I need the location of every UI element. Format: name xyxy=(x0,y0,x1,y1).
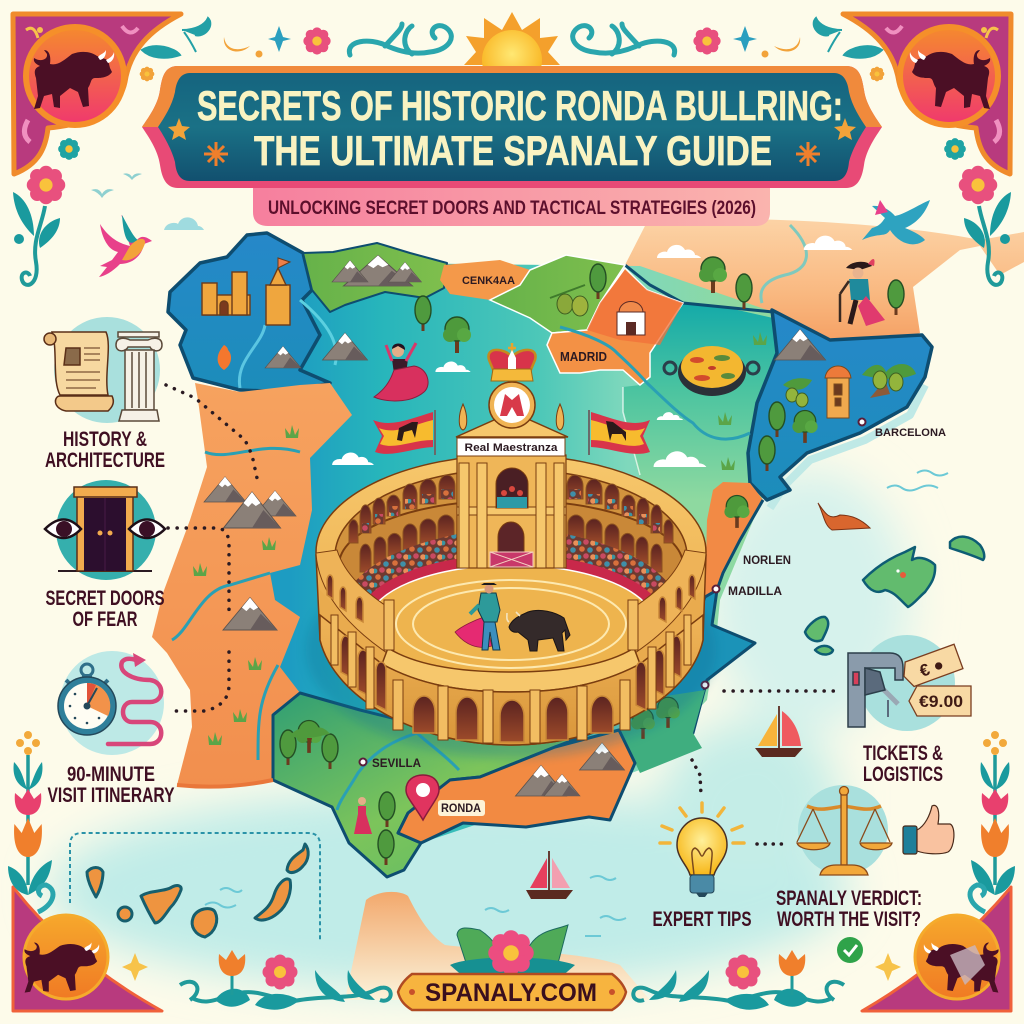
leaves left xyxy=(142,18,210,58)
wall arches xyxy=(327,575,695,742)
region: Cenkaa xyxy=(440,260,530,300)
icon: sailboat south xyxy=(526,851,573,899)
waves xyxy=(205,470,948,936)
region: Spain base xyxy=(270,262,773,850)
badge: SPANALY.COM: SPANALY.COM xyxy=(425,979,597,1007)
flag left xyxy=(373,410,435,455)
label: Ronda: RONDA xyxy=(441,801,481,815)
connector: verdict xyxy=(757,842,787,846)
label line 2: LOGISTICS xyxy=(863,763,943,786)
connector: history xyxy=(166,385,257,478)
bottom ornaments xyxy=(122,925,901,1010)
swirl right xyxy=(573,24,675,55)
finials xyxy=(459,404,564,430)
upper arcades xyxy=(349,475,673,543)
icon: olive tree xyxy=(862,364,916,398)
label: Madilla: MADILLA xyxy=(728,584,782,598)
floral left xyxy=(13,166,65,285)
floral stack right xyxy=(970,731,1015,912)
map decorations xyxy=(70,236,984,1000)
icons: trees xyxy=(280,257,904,865)
icon: winding path xyxy=(108,659,161,744)
region: northern green xyxy=(303,243,447,312)
barrier white line xyxy=(367,565,655,685)
icon: sun xyxy=(464,12,560,90)
right side wall xyxy=(630,550,706,655)
panel: verdict xyxy=(776,785,954,963)
rivers xyxy=(172,225,806,810)
small birds xyxy=(91,173,142,198)
lower crowd xyxy=(350,534,672,600)
front wall xyxy=(382,648,640,692)
lower tier xyxy=(339,500,683,630)
side florals upper xyxy=(13,166,1011,285)
banner panel xyxy=(158,73,866,181)
region: olive green xyxy=(490,255,625,333)
icon circle xyxy=(798,785,888,875)
banner upper edge xyxy=(142,66,882,127)
top rim xyxy=(316,455,706,649)
coast line: Valencia xyxy=(717,500,763,590)
connector: tickets xyxy=(724,689,838,693)
islands: Balearic xyxy=(805,537,984,655)
connector: itinerary xyxy=(175,652,229,711)
connector: expert tips xyxy=(692,760,701,795)
icon: thumbs up xyxy=(903,805,954,854)
label: HISTORY & xyxy=(63,428,147,451)
badge: SPANALY.COM xyxy=(398,974,626,1010)
region: Murcia coast xyxy=(640,590,755,733)
icon: castles xyxy=(202,268,290,325)
vine right xyxy=(633,982,844,1001)
arena xyxy=(306,343,716,758)
region: France xyxy=(625,219,1024,345)
icon: small dancer xyxy=(354,797,372,834)
region: Madrid xyxy=(547,268,683,385)
bull xyxy=(507,610,570,651)
flag right xyxy=(589,410,650,455)
icon: door xyxy=(58,487,152,571)
left side wall xyxy=(316,550,392,655)
outer wall xyxy=(316,555,706,745)
icon: torero figure xyxy=(840,259,885,326)
connector: doors xyxy=(168,528,229,610)
icon: column xyxy=(116,332,162,421)
lotus emblem xyxy=(450,925,575,978)
sea edge: Catalonia xyxy=(770,385,925,508)
panel: expert tips xyxy=(652,803,752,931)
label: Madrid: MADRID xyxy=(560,350,607,364)
sign: Real Maestranza xyxy=(457,438,565,456)
region: Portugal xyxy=(152,383,352,787)
icon: ticket €9.00 xyxy=(909,686,971,716)
icon: Madrid chapel xyxy=(617,302,645,335)
Africa coast xyxy=(345,892,650,1000)
region: south east green xyxy=(620,690,705,773)
arena floor xyxy=(396,580,626,668)
panel: itinerary xyxy=(48,651,174,807)
floral right xyxy=(959,166,1011,285)
title banner xyxy=(142,66,882,188)
flowers xyxy=(58,27,966,160)
leaves right xyxy=(814,18,882,58)
label: Sevilla: SEVILLA xyxy=(372,756,421,770)
title line 2: THE ULTIMATE SPANALY GUIDE xyxy=(254,127,772,174)
corner: top left xyxy=(13,14,181,174)
pediment xyxy=(456,412,568,437)
label: 90-MINUTE xyxy=(67,763,155,786)
region: Andalusia xyxy=(273,693,620,877)
icon: sailboat east xyxy=(755,706,803,757)
icon: ticket upper xyxy=(900,644,963,689)
label line 2: OF FEAR xyxy=(72,608,138,631)
inner stands xyxy=(335,469,687,643)
icon: flag on castle xyxy=(278,258,290,268)
city dots xyxy=(360,418,866,766)
label: SECRET DOORS xyxy=(46,587,164,610)
label: Norlen: NORLEN xyxy=(743,553,791,567)
icon: sea creature boat xyxy=(818,503,870,530)
bird left xyxy=(99,215,152,277)
map of Iberia xyxy=(152,219,1024,877)
label line 2: WORTH THE VISIT? xyxy=(777,908,921,931)
icon: palm xyxy=(290,727,330,752)
region: Galicia xyxy=(168,233,330,392)
label line 2: ARCHITECTURE xyxy=(45,449,165,472)
sea tint xyxy=(50,470,910,990)
icon: paella xyxy=(664,346,759,396)
vine left xyxy=(180,982,391,1001)
star right xyxy=(875,953,901,981)
boundary: east region xyxy=(623,387,640,475)
corner: bottom left xyxy=(13,887,162,1011)
star left xyxy=(122,953,148,981)
tulips and flowers xyxy=(219,950,805,990)
icon: ticket €9.00: €9.00 xyxy=(919,692,963,711)
icon: stopwatch xyxy=(58,664,116,735)
region: Valencia xyxy=(705,482,763,597)
cloud left xyxy=(164,217,204,230)
lower façade xyxy=(320,615,703,745)
icon: light bulb xyxy=(677,818,727,897)
icons: mountains xyxy=(204,255,826,796)
red barrier and floor xyxy=(361,560,661,690)
wall filler right xyxy=(630,590,702,672)
north coast line xyxy=(625,265,773,312)
label: SPANALY VERDICT: xyxy=(776,887,922,910)
top ornaments xyxy=(58,12,966,160)
icon: island marker xyxy=(896,569,906,578)
icon: map pin Ronda xyxy=(406,775,439,820)
icon: scales xyxy=(797,786,892,875)
icon: check badge xyxy=(837,937,863,963)
sign: Real Maestranza: Real Maestranza xyxy=(464,442,558,454)
tulip stems xyxy=(232,975,792,995)
Portugal coast shading xyxy=(177,780,273,787)
swirl left xyxy=(349,24,451,55)
stars xyxy=(268,26,757,52)
banner border xyxy=(142,66,882,188)
arena shadow xyxy=(306,542,716,758)
icon: ticket upper: € ● xyxy=(917,655,946,681)
panel: secret doors xyxy=(45,480,165,631)
label: Barcelona: BARCELONA xyxy=(875,427,946,439)
swirl leaves xyxy=(215,970,809,1010)
medallion xyxy=(489,382,535,428)
panel: tickets xyxy=(848,635,971,786)
region: Ronda and Granada xyxy=(398,730,635,843)
floral stack left xyxy=(8,731,53,912)
upper spectators xyxy=(362,489,660,533)
icon: olives xyxy=(550,285,588,316)
central façade xyxy=(457,455,566,568)
corner: top right xyxy=(843,14,1011,174)
torero xyxy=(455,583,500,650)
icon: dancer xyxy=(374,343,428,401)
icon: flame xyxy=(218,345,231,370)
crown xyxy=(488,343,536,381)
icon circle xyxy=(859,635,955,731)
clouds xyxy=(332,236,852,467)
dotted frame for Canary Islands xyxy=(70,833,320,940)
icon: arrow head xyxy=(133,653,146,667)
icon circle xyxy=(56,480,156,580)
wall filler left xyxy=(320,590,392,672)
bird right xyxy=(862,200,930,244)
label line 2: VISIT ITINERARY xyxy=(48,784,174,807)
panel: history and architecture xyxy=(44,317,165,472)
icon: eyes xyxy=(45,520,165,538)
banner stars xyxy=(168,118,856,166)
subtitle ribbon: UNLOCKING SECRET DOORS AND TACTICAL STRATEGIES (2026) xyxy=(268,198,756,219)
wall columns xyxy=(331,600,691,743)
icon circle xyxy=(54,317,160,423)
icon: bulb rays xyxy=(660,803,744,843)
icon circle xyxy=(60,651,164,755)
lower arcades xyxy=(360,515,662,572)
region: east teal xyxy=(623,303,777,560)
subtitle ribbon xyxy=(253,188,770,226)
region: Catalonia xyxy=(748,310,932,500)
label: Cenkaa: CENK4AA xyxy=(462,275,515,287)
corner: bottom right xyxy=(862,887,1011,1011)
icon: bell tower xyxy=(825,366,851,418)
moons and dots xyxy=(224,37,800,58)
icon: turnstile xyxy=(848,653,903,727)
islands: Canary xyxy=(87,844,308,937)
label: TICKETS & xyxy=(863,742,943,765)
icons: grass xyxy=(193,332,767,745)
icon: small olives xyxy=(783,378,812,407)
icon: scroll xyxy=(44,332,113,411)
label: EXPERT TIPS xyxy=(652,908,752,931)
